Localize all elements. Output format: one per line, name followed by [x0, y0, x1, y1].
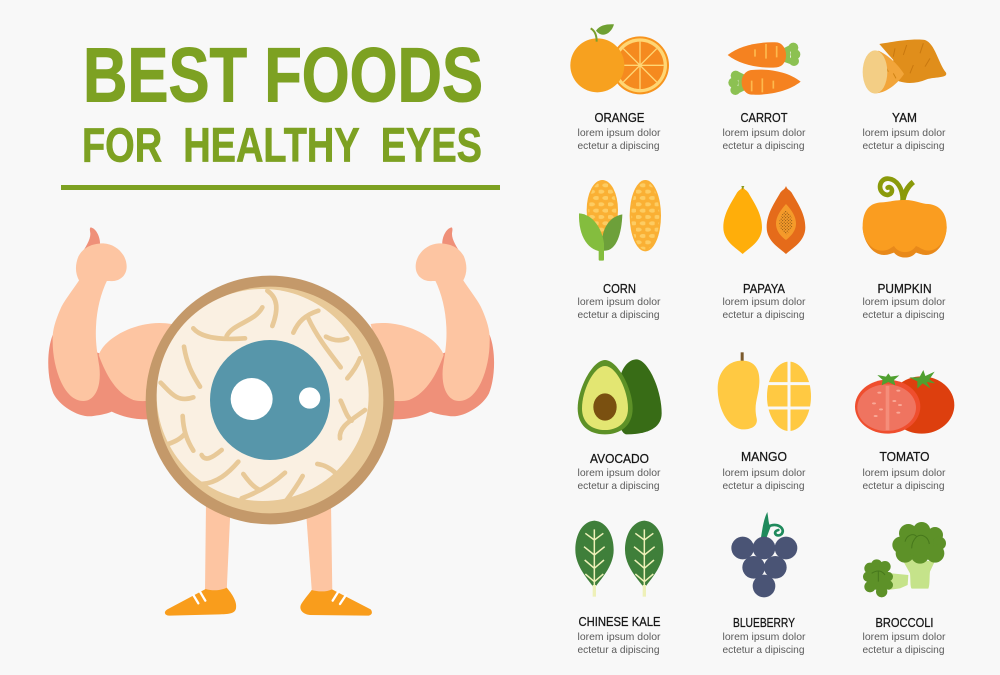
icon: blueberry	[731, 512, 797, 597]
food label: blueberry: BLUEBERRY	[733, 616, 796, 630]
food label: yam: YAM	[892, 111, 917, 125]
food label: corn: ectetur a dipiscing	[578, 309, 660, 321]
food icons, bottom rows	[575, 352, 954, 597]
food label: mango: lorem ipsum dolor	[722, 467, 806, 479]
food label: mango: ectetur a dipiscing	[722, 480, 805, 492]
icon: carrot	[728, 42, 801, 95]
icon: pumpkin	[863, 179, 947, 258]
right arm	[371, 227, 494, 419]
icon: avocado	[578, 359, 662, 434]
icon: papaya	[723, 186, 805, 254]
icon: broccoli	[863, 522, 946, 597]
blood vessels	[161, 291, 365, 500]
food label: yam: ectetur a dipiscing	[862, 140, 945, 152]
title: BEST FOODS	[83, 32, 483, 118]
food label: chinese kale	[578, 615, 661, 656]
food label: carrot: ectetur a dipiscing	[722, 140, 805, 152]
food label: carrot	[722, 111, 806, 152]
food label: broccoli: BROCCOLI	[876, 616, 934, 630]
food label: broccoli	[862, 616, 946, 656]
eyeball character	[48, 227, 494, 616]
icon: corn	[579, 180, 661, 261]
eyeball	[146, 276, 394, 524]
small pupil highlight	[299, 387, 320, 409]
food label: orange: ORANGE	[594, 111, 644, 125]
food label: tomato: TOMATO	[880, 450, 930, 464]
food label: orange	[578, 111, 661, 152]
iris	[210, 340, 330, 460]
food label: avocado	[578, 452, 661, 492]
right leg	[306, 503, 332, 593]
title: FOR HEALTHY EYES	[82, 120, 482, 172]
food label: pumpkin: ectetur a dipiscing	[862, 309, 945, 321]
food label: tomato: lorem ipsum dolor	[862, 467, 946, 479]
food label: chinese kale: lorem ipsum dolor	[578, 631, 661, 643]
food label: papaya: lorem ipsum dolor	[722, 296, 806, 308]
food label: chinese kale: CHINESE KALE	[578, 615, 660, 629]
icon: chinese kale	[575, 521, 663, 597]
food label: mango	[722, 450, 806, 492]
food label: yam: lorem ipsum dolor	[862, 127, 946, 139]
food label: avocado: lorem ipsum dolor	[578, 467, 661, 479]
food label: papaya: ectetur a dipiscing	[722, 309, 805, 321]
food label: broccoli: ectetur a dipiscing	[862, 644, 945, 656]
food label: pumpkin: lorem ipsum dolor	[862, 296, 946, 308]
food label: papaya: PAPAYA	[743, 282, 786, 296]
food label: broccoli: lorem ipsum dolor	[862, 631, 946, 643]
icon: orange	[570, 24, 669, 94]
food label: avocado: AVOCADO	[590, 452, 649, 466]
icon: yam	[863, 40, 946, 94]
title underline	[61, 185, 500, 190]
food label: pumpkin: PUMPKIN	[878, 282, 932, 296]
food icons, top rows	[570, 24, 947, 261]
food label: mango: MANGO	[741, 450, 787, 464]
food label: corn: lorem ipsum dolor	[578, 296, 661, 308]
left arm	[48, 227, 172, 419]
icon: mango	[718, 352, 812, 433]
food label: orange: lorem ipsum dolor	[578, 127, 661, 139]
food label: carrot: lorem ipsum dolor	[722, 127, 806, 139]
food label: blueberry: ectetur a dipiscing	[722, 644, 805, 656]
food label: tomato: ectetur a dipiscing	[862, 480, 945, 492]
left leg	[205, 503, 230, 592]
food label: pumpkin	[862, 282, 946, 321]
left shoe	[165, 588, 236, 616]
food label: corn	[578, 282, 661, 321]
food label: corn: CORN	[603, 282, 636, 296]
food label: chinese kale: ectetur a dipiscing	[578, 644, 660, 656]
food label: avocado: ectetur a dipiscing	[578, 480, 660, 492]
icon: tomato	[855, 370, 954, 434]
title	[82, 32, 483, 172]
right shoe	[300, 589, 372, 616]
food label: blueberry	[722, 616, 806, 656]
food label: papaya	[722, 282, 806, 321]
food label: yam	[862, 111, 946, 152]
large pupil highlight	[231, 378, 273, 420]
food label: tomato	[862, 450, 946, 492]
food label: blueberry: lorem ipsum dolor	[722, 631, 806, 643]
food label: carrot: CARROT	[740, 111, 788, 125]
food label: orange: ectetur a dipiscing	[578, 140, 660, 152]
